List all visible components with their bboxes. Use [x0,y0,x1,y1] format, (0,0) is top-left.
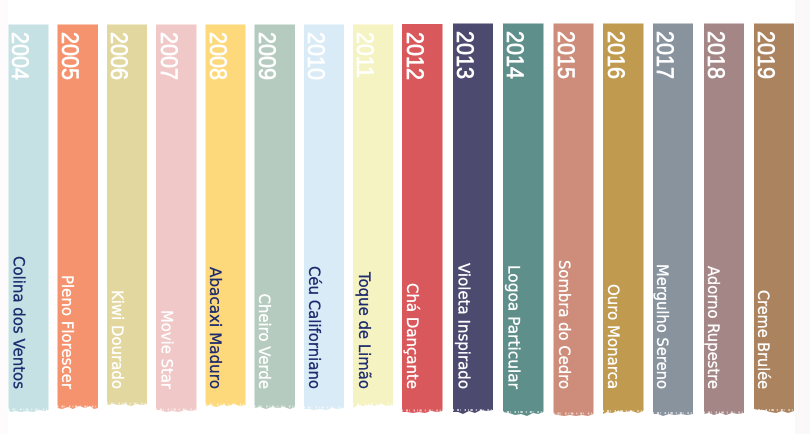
name: Cheiro Verde: Cheiro Verde [255,294,274,389]
swatch 2019 [754,24,794,413]
swatch 2018 [704,24,744,415]
name: Movie Star: Movie Star [158,310,176,389]
year 2012: 2012 [401,32,428,80]
year 2008: 2008 [204,32,231,80]
name: Logoa Particular: Logoa Particular [505,265,524,389]
name: Colina dos Ventos: Colina dos Ventos [10,256,28,389]
swatch 2009 [254,24,295,409]
bar: 2009 Cheiro Verde [253,24,295,409]
name: Chá Dançante: Chá Dançante [403,283,422,389]
bar: 2007 Movie Star [155,24,196,412]
bar: 2010 Céu Californiano [302,24,344,410]
year 2013: 2013 [451,31,478,79]
bar: 2018 Adorno Rupestre [702,24,744,415]
bar: 2019 Creme Brulée [752,24,794,413]
bar: 2016 Ouro Monarca [602,24,644,414]
bar: 2012 Chá Dançante [401,24,442,413]
year 2019: 2019 [752,31,779,79]
year 2011: 2011 [351,32,378,78]
bar: 2013 Violeta Inspirado [451,24,493,414]
name: Creme Brulée: Creme Brulée [754,290,773,389]
swatch 2012 [402,24,442,413]
name: Mergulho Sereno: Mergulho Sereno [653,264,672,389]
year 2017: 2017 [651,31,678,79]
swatch 2008 [206,24,246,407]
year 2015: 2015 [552,31,579,79]
bar: 2014 Logoa Particular [501,24,544,416]
name: Ouro Monarca: Ouro Monarca [604,284,623,389]
swatch 2014 [503,24,544,416]
bar: 2008 Abacaxi Maduro [204,24,246,407]
swatch 2017 [653,24,693,416]
bar: 2006 Kiwi Dourado [105,24,147,406]
name: Abacaxi Maduro: Abacaxi Maduro [206,267,225,389]
name: Céu Californiano: Céu Californiano [305,266,324,389]
swatch 2011 [353,24,393,408]
bar: 2017 Mergulho Sereno [651,24,693,416]
year 2007: 2007 [155,32,182,80]
swatch 2013 [453,24,493,414]
bar: 2011 Toque de Limão [351,24,393,408]
name: Pleno Florescer: Pleno Florescer [58,275,77,389]
swatch 2005 [58,24,98,409]
name: Kiwi Dourado: Kiwi Dourado [108,290,127,389]
swatch 2007 [156,24,196,412]
year 2018: 2018 [702,31,729,79]
swatch 2004 [8,24,48,412]
year 2009: 2009 [253,32,280,80]
year 2016: 2016 [602,31,629,79]
name: Toque de Limão: Toque de Limão [355,271,374,389]
name: Adorno Rupestre: Adorno Rupestre [704,266,723,389]
year 2006: 2006 [105,32,132,80]
name: Violeta Inspirado: Violeta Inspirado [455,263,474,389]
year 2014: 2014 [501,31,528,79]
year 2005: 2005 [56,32,83,80]
bar: 2004 Colina dos Ventos [6,24,48,412]
year 2010: 2010 [302,32,329,80]
year 2004: 2004 [6,32,33,80]
name: Sombra do Cedro: Sombra do Cedro [555,260,574,389]
swatch 2015 [554,24,594,416]
bar: 2015 Sombra do Cedro [552,24,594,416]
swatch 2016 [603,24,644,414]
swatch 2010 [304,24,344,410]
swatch 2006 [107,24,147,406]
bar: 2005 Pleno Florescer [56,24,98,409]
